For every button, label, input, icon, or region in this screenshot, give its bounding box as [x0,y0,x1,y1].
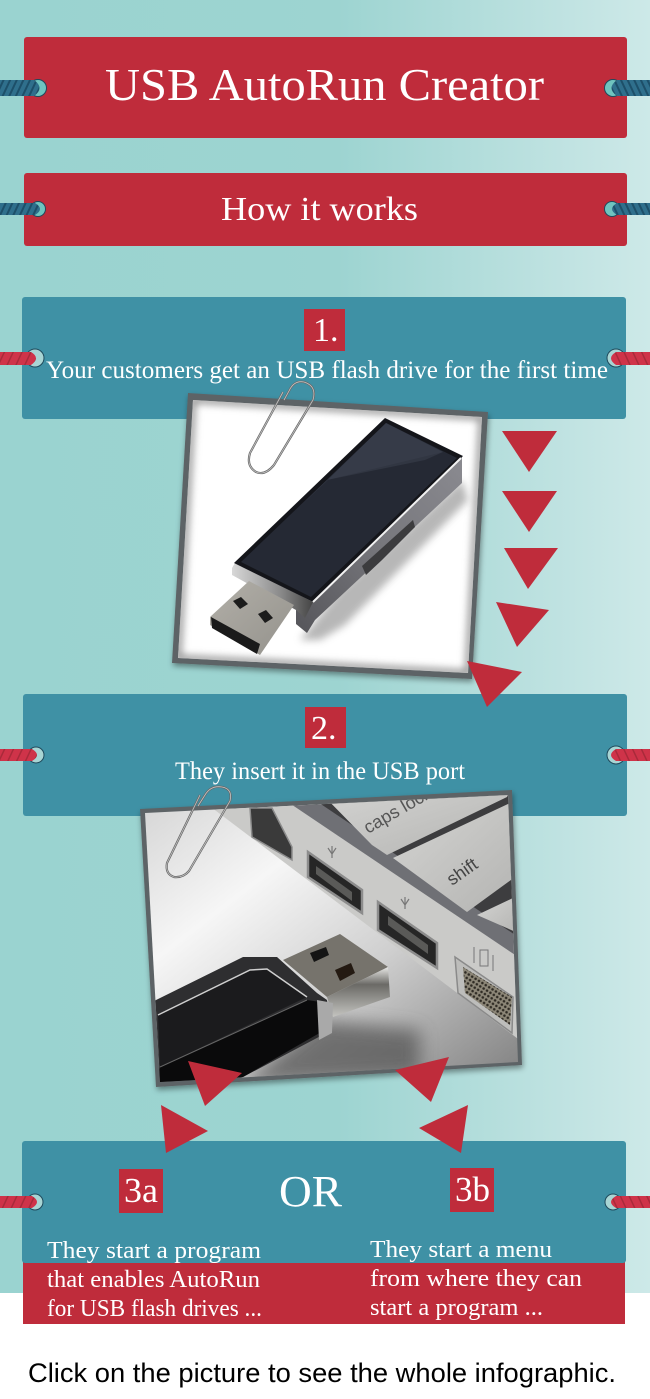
step number 1 [304,309,345,351]
step number 1: 1. [313,312,338,349]
drive gloss reflection [328,436,372,480]
panel: step 2 [0,694,650,816]
drive dark rim [234,418,463,602]
arrow 8 [161,1105,208,1153]
step number 3b: 3b [455,1170,490,1209]
photo: USB flash drive [172,382,488,679]
step number 3a [119,1169,163,1213]
icon: left blue rope [0,80,46,96]
arrow 6 [188,1061,242,1106]
panel: subtitle banner [0,173,650,246]
title: USB AutoRun Creator [105,60,544,110]
arrow 9 [419,1105,468,1153]
icon: left red rope step 2 [0,747,44,763]
slider [362,520,415,575]
drive highlight line [313,458,461,602]
dark keyboard groove [293,795,514,954]
drive metal front [232,563,313,618]
option 3a text [47,1238,262,1322]
paper clip [167,787,231,877]
arrow 3 [504,548,558,589]
icon: right red rope step 2 [607,746,650,764]
arrow 2 [502,491,557,532]
paper clip [249,382,314,473]
option 3a text: for USB flash drives ... [47,1296,262,1322]
icon: left red rope [0,349,44,367]
subtitle: How it works [221,191,418,228]
third key [477,898,514,931]
USB port 2 [378,897,437,968]
footer caption: Click on the picture to see the whole infographic. [28,1358,616,1388]
caps lock key: caps lock [360,782,436,837]
step number 2: 2. [311,710,336,747]
black drive body [156,957,328,1082]
icon: right red rope [607,349,650,367]
caps lock key [332,795,508,855]
photo: drive and laptop port [140,782,530,1090]
arrow 4 [496,602,549,647]
step 1 text: Your customers get an USB flash drive for the first time [46,357,608,384]
VGA port [455,947,513,1033]
USB plug [283,934,390,1017]
USB port 1 [308,846,362,913]
HDMI port [250,808,292,860]
option 3a text: that enables AutoRun [47,1267,260,1293]
option 3b text: They start a menu [370,1237,552,1263]
icon: right blue rope [604,80,650,96]
USB plug [210,581,294,655]
option 3b text: from where they can [370,1266,582,1292]
step number 2 [305,707,346,748]
arrow 1 [502,431,557,472]
arrow 7 [395,1057,449,1102]
option 3b text [370,1237,582,1321]
panel: step 3 [0,1141,650,1324]
arrow 5 [467,661,522,707]
step number 3a: 3a [124,1171,158,1210]
shift key: shift [443,854,481,889]
arrows: flow triangles [161,431,558,1153]
panel: step 1 [0,297,650,419]
icon: right red rope step 3 [605,1194,650,1210]
icon: left red rope step 3 [0,1194,43,1210]
laptop side panel [214,795,518,1038]
option 3b text: start a program ... [370,1295,543,1321]
drive metal side [296,457,462,633]
icon: left blue rope small [0,202,46,216]
drive shadow [240,1020,420,1085]
step 2 text: They insert it in the USB port [175,758,465,785]
icon: right blue rope small [604,202,650,216]
shift key [393,803,515,912]
option 3a text: They start a program [47,1238,261,1264]
drive glossy top [241,423,457,597]
panel: title banner [0,37,650,138]
OR label: OR [279,1167,343,1216]
